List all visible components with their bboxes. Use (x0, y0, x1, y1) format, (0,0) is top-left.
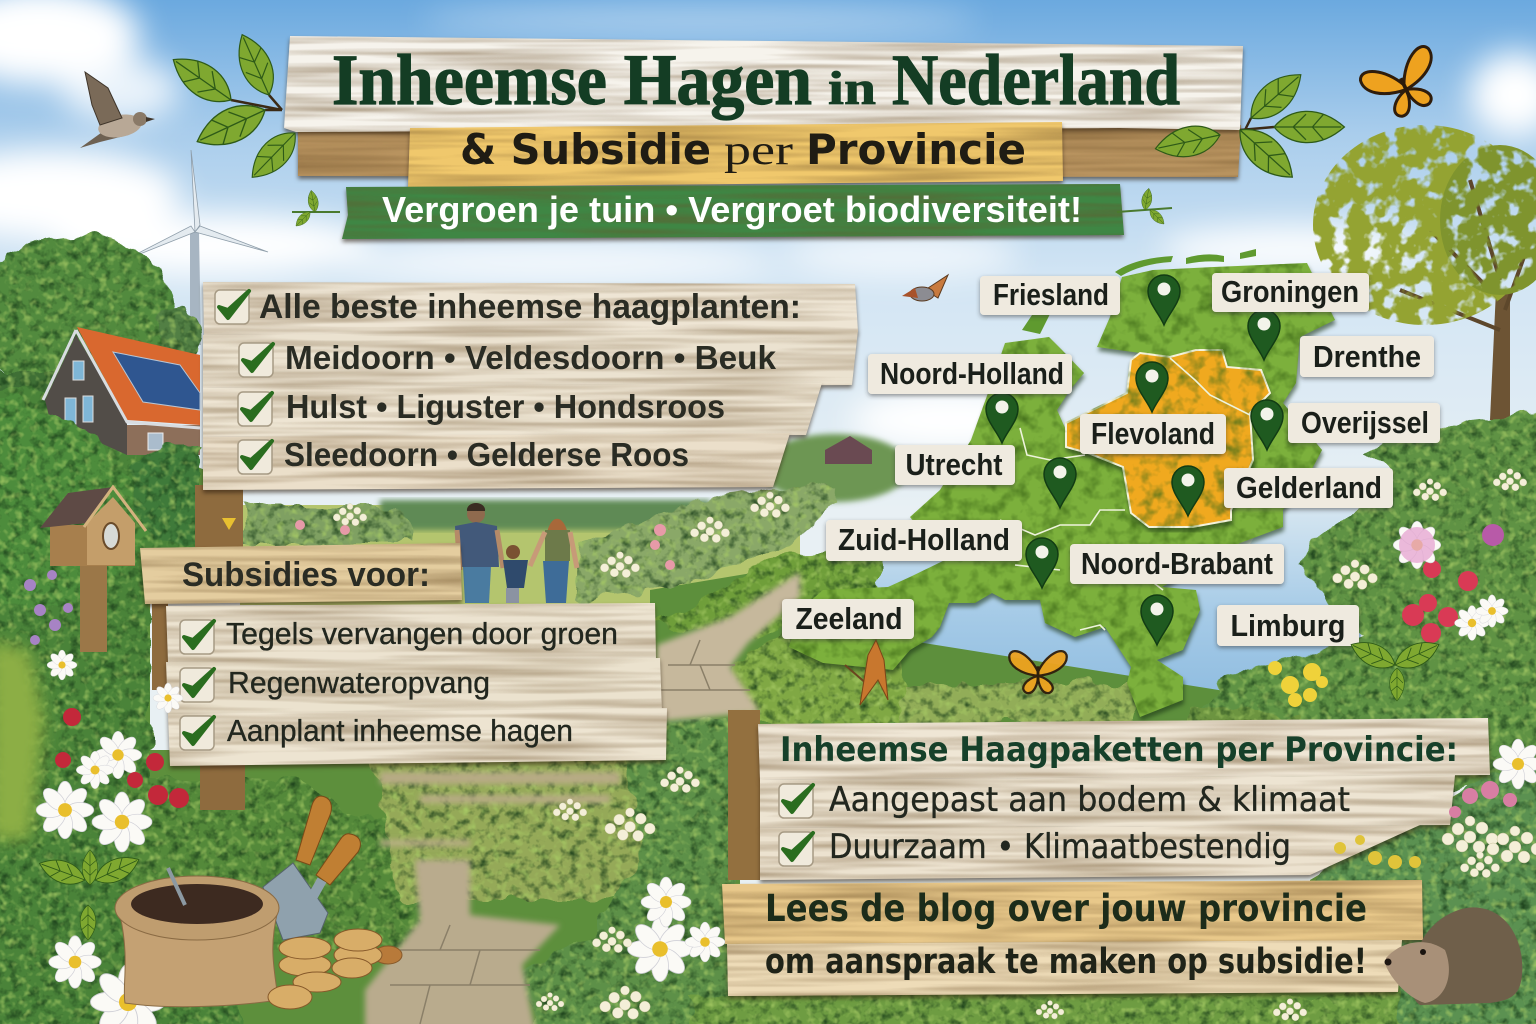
subsidy row 3: Aanplant inheemse hagen (227, 713, 573, 748)
lower plank (727, 940, 1402, 996)
flowers bottom centre (536, 767, 1307, 1021)
label: Flevoland: Flevoland (1091, 416, 1215, 451)
pin: Flevoland (1136, 362, 1168, 412)
birdhouse on post (40, 487, 146, 652)
grass left edge (0, 640, 45, 840)
map: province borders (1000, 358, 1250, 630)
map: islands (1022, 249, 1256, 334)
pin: Utrecht (1044, 458, 1076, 508)
ground base (0, 390, 1536, 1024)
plant row 1: Meidoorn • Veldesdoorn • Beuk (285, 339, 777, 376)
pin: Groningen (1248, 310, 1280, 360)
pin: Zuid-Holland (1026, 538, 1058, 588)
subsidy line: om aanspraak te maken op subsidie! (765, 942, 1367, 982)
list planks (166, 603, 656, 662)
subsidy row 1: Tegels vervangen door groen (226, 616, 618, 651)
squirrel figure at Zeeland (845, 640, 888, 705)
large leaves left (36, 850, 143, 940)
package row 2: Duurzaam • Klimaatbestendig (829, 827, 1291, 867)
yellow subtitle plank (408, 122, 1063, 187)
wind turbine (125, 150, 268, 345)
distant field and horizon (240, 434, 910, 605)
title text: in (828, 62, 876, 115)
label: Utrecht: Utrecht (906, 447, 1002, 482)
distant tree left (0, 235, 202, 470)
panel heading: Inheemse Haagpaketten per Provincie: (780, 730, 1458, 770)
flowers bottom right (1334, 739, 1536, 878)
clouds (0, 0, 1536, 450)
flowers right garden (1268, 469, 1527, 707)
yellow plank (722, 880, 1423, 944)
stone garden path (365, 572, 800, 1024)
green banner (342, 184, 1124, 239)
map: green provinces (789, 263, 1335, 717)
panel: inheemse haagpakketten (728, 710, 1490, 880)
white top plank (284, 36, 1243, 132)
hedgehog (1384, 907, 1522, 1005)
subtitle text: & Subsidie (460, 125, 711, 174)
label: Groningen: Groningen (1221, 274, 1359, 309)
label: Gelderland: Gelderland (1236, 470, 1382, 505)
label: Limburg: Limburg (1230, 608, 1346, 643)
panel: subsidies voor (140, 543, 667, 810)
panel: beste inheemse haagplanten (195, 282, 858, 547)
post flower (222, 518, 236, 530)
burlap sack of soil (115, 868, 279, 1007)
label: Zeeland: Zeeland (796, 601, 902, 636)
pin: Friesland (1148, 275, 1180, 325)
small butterfly near map (902, 275, 948, 301)
label: Drenthe: Drenthe (1313, 339, 1421, 374)
stone joints (390, 640, 750, 1024)
dark plants by the sack (130, 780, 440, 950)
sign posts (152, 600, 245, 810)
pin: Overijssel (1251, 400, 1283, 450)
bush in front of house (0, 395, 200, 610)
garden trowels (263, 796, 360, 940)
subsidy row 2: Regenwateropvang (228, 665, 490, 700)
butterfly over map (1009, 651, 1067, 693)
water behind map (870, 480, 1400, 700)
panel heading: Subsidies voor: (182, 556, 430, 594)
header plank (140, 543, 462, 604)
banner slogan: Vergroen je tuin • Vergroet biodiversiteit! (382, 189, 1082, 230)
sign planks (758, 718, 1490, 780)
garden tree right (1313, 125, 1536, 420)
purple flowers (24, 570, 73, 645)
panel: call to action (722, 880, 1423, 996)
house with solar panels (43, 327, 200, 455)
flowers left (36, 650, 189, 1024)
banner sprigs (292, 187, 1172, 229)
sign planks (203, 282, 858, 335)
bird (80, 72, 155, 148)
butterfly top right (1358, 44, 1450, 126)
blog line: Lees de blog over jouw provincie (765, 887, 1367, 930)
flowering hedge (243, 482, 840, 600)
sign post (728, 710, 760, 880)
label: Zuid-Holland: Zuid-Holland (838, 522, 1010, 557)
plant row 2: Hulst • Liguster • Hondsroos (286, 388, 725, 425)
title text: Inheemse Hagen (332, 40, 812, 120)
package row 1: Aangepast aan bodem & klimaat (829, 780, 1350, 820)
label: Overijssel: Overijssel (1301, 405, 1429, 440)
panel heading: Alle beste inheemse haagplanten: (259, 288, 801, 326)
plant row 3: Sleedoorn • Gelderse Roos (284, 436, 689, 473)
pin: Gelderland (1172, 466, 1204, 516)
tan bands in grass (380, 772, 620, 846)
grassy middle ground (370, 755, 640, 900)
right garden foliage (1200, 410, 1536, 790)
lower brown plank (298, 125, 1241, 177)
garden beds bottom (520, 548, 1536, 1024)
label: Noord-Brabant: Noord-Brabant (1081, 546, 1273, 581)
map: orange provinces (1066, 350, 1270, 527)
pin: Limburg (1141, 595, 1173, 645)
stack of wooden coins (268, 929, 402, 1009)
title text (332, 40, 1180, 120)
provincial map of the Netherlands (789, 249, 1335, 717)
title text: Nederland (892, 40, 1180, 120)
leaf sprig right of title (1152, 64, 1344, 189)
subtitle text: per (724, 128, 793, 174)
leaf sprig left of title (164, 29, 305, 187)
label: Noord-Holland: Noord-Holland (880, 356, 1064, 391)
family walking (455, 503, 577, 603)
sign post (195, 485, 243, 547)
title sign (284, 36, 1243, 239)
left garden foliage (0, 385, 240, 1024)
subtitle text: Provincie (806, 125, 1026, 174)
subtitle text (460, 125, 1026, 174)
pin: Noord-Holland (986, 393, 1018, 443)
map labels (782, 273, 1440, 646)
label: Friesland: Friesland (993, 277, 1109, 312)
